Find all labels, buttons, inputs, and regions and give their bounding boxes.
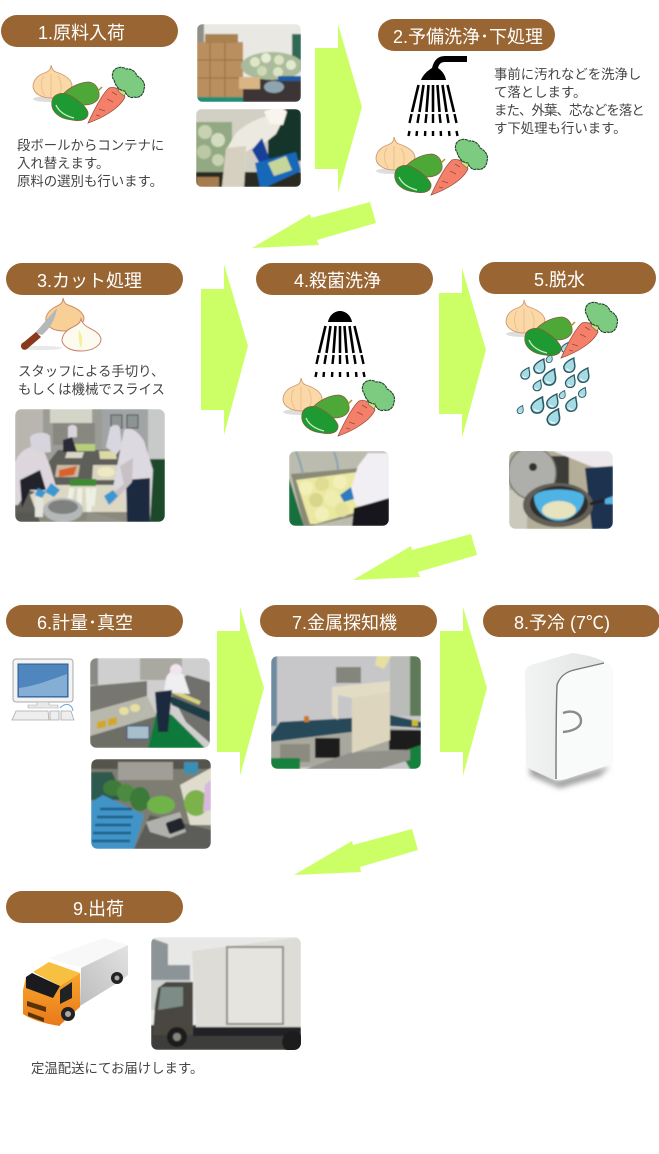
heading: step 8: 8.予冷 (7℃) <box>514 613 610 633</box>
heading: step 9 <box>6 891 183 923</box>
photo: wash tank with cut vegetables <box>289 451 389 526</box>
text: step 3 description: もしくは機械でスライス <box>18 382 165 397</box>
heading: step 5: 5.脱水 <box>534 270 585 290</box>
heading: step 4: 4.殺菌洗浄 <box>294 271 381 291</box>
text: step 2 description: て落とします。 <box>494 85 586 100</box>
icon: white refrigerator <box>525 653 613 788</box>
panel: step 3 cutting <box>6 263 183 522</box>
heading: step 6: 6.計量･真空 <box>37 613 133 633</box>
photo: stacked boxes and produce <box>197 24 303 102</box>
heading: step 7 <box>260 605 437 637</box>
panel: step 1 raw material receiving <box>1 15 303 189</box>
photo: vacuum packing machine <box>90 658 210 748</box>
panel: step 2 pre-wash <box>376 19 644 195</box>
panel: step 8 pre-cooling <box>483 605 659 788</box>
photo: worker sorting produce <box>196 108 301 187</box>
panel: step 4 sterilising wash <box>256 263 433 526</box>
photo: staff cutting vegetables <box>15 409 165 522</box>
text: step 1 description: 入れ替えます。 <box>17 156 109 171</box>
arrow: step 3 to 4 <box>201 264 248 435</box>
panel: step 9 shipping <box>6 891 304 1076</box>
icon: orange truck <box>23 938 128 1026</box>
heading: step 6 <box>6 605 183 637</box>
icon: desktop computer <box>12 659 74 720</box>
text: step 2 description: 事前に汚れなどを洗浄し <box>494 66 641 82</box>
heading: step 8 <box>483 605 659 637</box>
heading: step 1 <box>1 15 178 47</box>
heading: step 4 <box>256 263 433 295</box>
photo: refrigerated truck <box>151 937 304 1053</box>
heading: step 2 <box>378 19 555 51</box>
icon: shower over vegetables <box>283 311 395 436</box>
photo: metal detector on conveyor <box>271 656 421 769</box>
text: step 9 description: 定温配送にてお届けします。 <box>31 1061 203 1076</box>
heading: step 1: 1.原料入荷 <box>38 23 125 43</box>
arrow: step 5 to 6 <box>353 534 477 580</box>
heading: step 3 <box>6 263 183 295</box>
panel: step 7 metal detector <box>260 605 437 769</box>
heading: step 7: 7.金属探知機 <box>292 613 397 633</box>
photo: packed greens on scale <box>91 759 211 849</box>
panel: step 5 dehydration <box>479 262 656 529</box>
arrow: step 6 to 7 <box>217 607 264 776</box>
heading: step 5 <box>479 262 656 294</box>
icon: shower over vegetables <box>376 56 488 195</box>
heading: step 9: 9.出荷 <box>73 899 124 919</box>
text: step 1 description: 段ボールからコンテナに <box>17 138 164 153</box>
icon: vegetables <box>33 65 145 123</box>
arrow: step 8 to 9 <box>294 829 418 875</box>
text: step 3 description: スタッフによる手切り、 <box>18 364 164 379</box>
heading: step 3: 3.カット処理 <box>37 271 142 291</box>
heading: step 2: 2.予備洗浄･下処理 <box>393 27 543 47</box>
text: step 2 description: また、外葉、芯などを落と <box>494 103 644 118</box>
arrow: step 7 to 8 <box>440 607 487 776</box>
text: step 1 description: 原料の選別も行います。 <box>17 174 163 189</box>
arrow: step 1 to 2 <box>315 24 362 193</box>
icon: knife and onion <box>21 298 101 351</box>
photo: spin dryer <box>508 447 613 529</box>
text: step 2 description: す下処理も行います。 <box>494 121 627 136</box>
arrow: step 2 to 3 <box>252 202 376 248</box>
icon: vegetables and water drops <box>506 300 618 425</box>
arrow: step 4 to 5 <box>439 268 486 438</box>
panel: step 6 weighing and vacuum <box>6 605 211 849</box>
